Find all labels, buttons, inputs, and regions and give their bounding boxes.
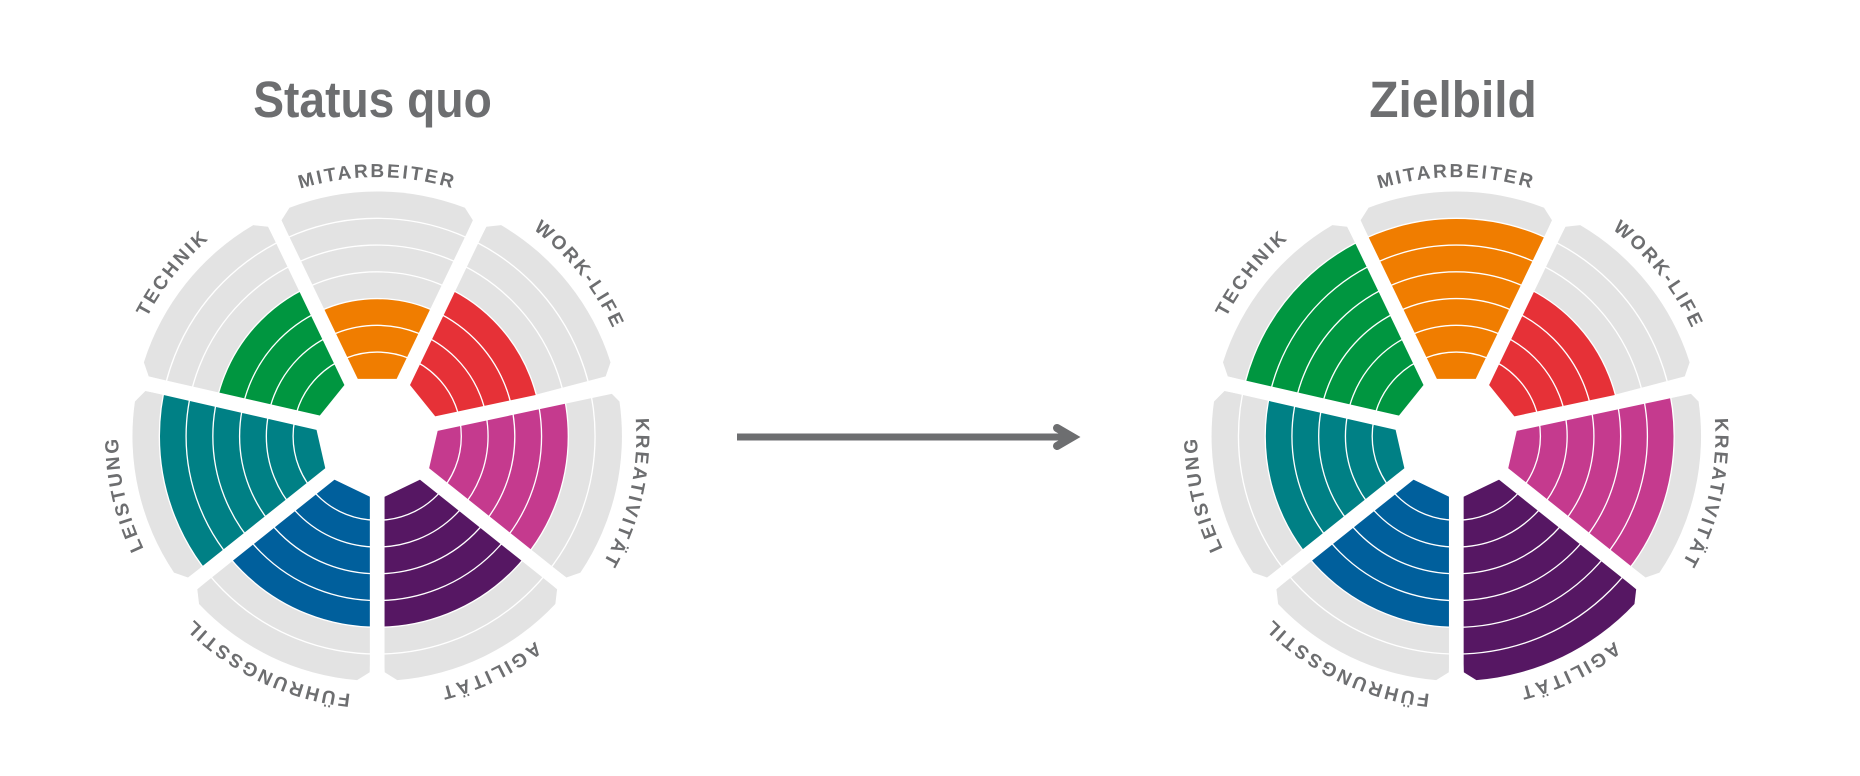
segment: Work-Life, level 4 bbox=[1397, 209, 1707, 511]
segment: Agilität, level 5 bbox=[291, 395, 570, 698]
label: Agilität: AGILITÄT bbox=[444, 642, 539, 700]
label: Mitarbeiter: MITARBEITER bbox=[298, 164, 454, 188]
segment: Technik, level 4 bbox=[126, 209, 437, 511]
segment: Kreativität, level 6 bbox=[1435, 343, 1716, 584]
segment: Technik, level 6 bbox=[1205, 209, 1516, 511]
label: Technik: TECHNIK bbox=[136, 230, 208, 314]
title: Status quo: Status quo bbox=[253, 71, 492, 128]
title: Zielbild: Zielbild bbox=[1369, 71, 1537, 128]
label: Kreativität: KREATIVITÄT bbox=[1684, 419, 1729, 568]
segment: Mitarbeiter, level 3 bbox=[282, 191, 473, 436]
panel: Zielbild wheel bbox=[1184, 71, 1729, 708]
label: Technik: TECHNIK bbox=[1214, 230, 1288, 314]
segment: Mitarbeiter, level 6 bbox=[1361, 191, 1552, 436]
label: Kreativität: KREATIVITÄT bbox=[606, 419, 650, 568]
segment gaps and hub bbox=[1207, 206, 1706, 692]
segment: Führungsstil, level 5 bbox=[1264, 395, 1543, 698]
label: Führungsstil: FÜHRUNGSSTIL bbox=[190, 620, 350, 708]
label: Leistung: LEISTUNG bbox=[105, 440, 144, 553]
segment: Work-Life, level 4 bbox=[318, 209, 628, 511]
scale rings bbox=[159, 218, 595, 654]
panel: status quo wheel bbox=[105, 71, 650, 708]
arrow: status quo to target bbox=[737, 428, 1072, 446]
label: Agilität: AGILITÄT bbox=[1524, 642, 1618, 700]
segment: Leistung, level 5 bbox=[1196, 343, 1478, 584]
segment: Leistung, level 6 bbox=[117, 343, 398, 584]
scale rings bbox=[1238, 218, 1674, 654]
label: Work-Life: WORK-LIFE bbox=[1615, 219, 1703, 328]
segment: Kreativität, level 5 bbox=[356, 343, 637, 584]
label: Führungsstil: FÜHRUNGSSTIL bbox=[1270, 620, 1428, 708]
segment gaps and hub bbox=[128, 206, 627, 692]
label: Mitarbeiter: MITARBEITER bbox=[1377, 164, 1532, 188]
label: Work-Life: WORK-LIFE bbox=[536, 219, 624, 328]
segment: Führungsstil, level 5 bbox=[185, 395, 463, 698]
segment: Agilität, level 7 bbox=[1370, 395, 1649, 698]
label: Leistung: LEISTUNG bbox=[1184, 440, 1222, 553]
